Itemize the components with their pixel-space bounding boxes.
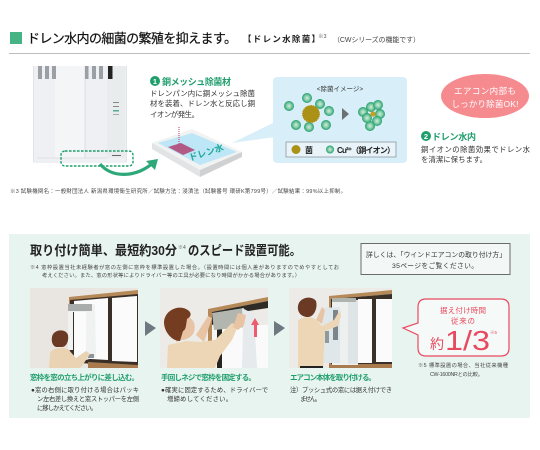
- callout 2: drain water: 2: [424, 132, 428, 141]
- air filter panel: [212, 308, 246, 330]
- callout body: 材を装着、ドレン水と反応し銅: [150, 99, 255, 108]
- installation heading: [30, 243, 301, 258]
- panel: sterilisation image: [232, 77, 407, 163]
- photo step 3: [289, 288, 392, 368]
- panel caption: <除菌イメージ>: [317, 84, 363, 93]
- footnote 4: 考えください。また、窓の形状等によりドライバー等の工具が必要になり時間がかかる場合があります。）: [42, 271, 300, 279]
- copper ions around bacterium: [284, 93, 334, 132]
- number badge: [150, 76, 160, 86]
- callout 1: copper mesh: 1: [153, 77, 157, 86]
- number badge: [421, 131, 431, 141]
- arrow: to drain pan: [100, 163, 153, 174]
- step 3 caption: エアコン本体を取り付ける。: [290, 372, 376, 382]
- series note: （CWシリーズの機能です）: [333, 35, 420, 44]
- dotted leader: [178, 127, 180, 144]
- woman from behind: [49, 348, 90, 368]
- step 2 caption: 増締めしてください。: [167, 394, 232, 403]
- callout heading: 銅メッシュ除菌材: [162, 76, 231, 87]
- icon: green square: [10, 32, 22, 44]
- heading text: ドレン水内の細菌の繁殖を抑えます。: [27, 31, 237, 46]
- callout 2: drain water: [421, 131, 531, 164]
- heading tag: 【ドレン水除菌】: [243, 34, 320, 44]
- badge: pink oval: [441, 74, 529, 118]
- callout body: 銅イオンの除菌効果でドレン水: [421, 145, 531, 154]
- arrow: step 1 to 2: [145, 321, 156, 336]
- speech bubble: one third time: 従来の: [451, 316, 475, 326]
- fitting duct: [332, 298, 358, 365]
- installation heading: 取り付け簡単、最短約30分: [30, 243, 177, 258]
- callout wedge: [232, 122, 275, 143]
- step 1 caption: [30, 372, 139, 412]
- dashed highlight: [61, 151, 133, 166]
- step 3 caption: ません。: [300, 395, 321, 403]
- arrow: before to after: [342, 108, 349, 120]
- callout 1: copper mesh: [150, 76, 255, 119]
- installation heading: ※4: [178, 245, 186, 251]
- legend: 菌: [305, 145, 313, 155]
- speech bubble: one third time: [403, 299, 509, 356]
- fitting duct: [68, 304, 96, 360]
- photo step 2: [160, 288, 268, 368]
- bacterium: [302, 106, 320, 122]
- woman from behind: [298, 310, 341, 368]
- legend: [286, 142, 396, 157]
- step 3 caption: 注）プッシュ式の窓には据え付けでき: [290, 385, 392, 394]
- callout body: を清潔に保ちます。: [421, 155, 487, 164]
- callout body: イオンが発生。: [150, 110, 199, 119]
- callout body: [421, 145, 531, 164]
- reference box: 35ページをご覧ください。: [392, 261, 478, 270]
- installation heading: のスピード設置可能。: [188, 243, 301, 258]
- step 1 caption: に移しかえてください。: [37, 403, 97, 412]
- ions attacking bacterium: [358, 100, 385, 131]
- red arrow up: [251, 318, 259, 337]
- reference box: [361, 244, 510, 274]
- drain pan highlight with arrow: [61, 151, 158, 174]
- callout body: [150, 89, 255, 119]
- callout heading: ドレン水内: [432, 131, 476, 142]
- footnote 3: ※3 試験機関名：一般財団法人 新潟県環境衛生研究所／試験方法：浸漬法（試験番号 環研K第799号）／試験結果：99%以上抑制。: [10, 187, 346, 195]
- footnote mark: ※3: [318, 33, 327, 40]
- step 2 caption: ●確実に固定するため、ドライバーで: [161, 385, 268, 394]
- panel: installation: [9, 234, 530, 418]
- step 3 caption: [290, 372, 392, 403]
- step 1 caption: ●窓の右側に取り付ける場合はパッキ: [31, 385, 139, 394]
- illustration: air conditioner front: [33, 66, 127, 163]
- step 2 caption: 手回しネジで窓枠を固定する。: [161, 372, 256, 382]
- badge: pink oval: エアコン内部も: [454, 86, 516, 96]
- section heading: drain water: [10, 31, 420, 46]
- woman side: [167, 323, 238, 368]
- copper mesh patch: [168, 143, 195, 155]
- water label: ドレン水: [187, 141, 225, 163]
- footnote 5: [418, 361, 509, 378]
- badge: pink oval: しっかり除菌OK!: [452, 99, 518, 109]
- speech bubble: one third time: 1/3: [445, 325, 490, 356]
- callout body: ドレンパン内に銅メッシュ除菌: [150, 89, 255, 98]
- speech bubble: one third time: ※5: [490, 330, 497, 335]
- step 1 caption: 窓枠を窓の立ち上がりに差し込む。: [30, 372, 139, 382]
- air conditioner unit: [323, 307, 340, 363]
- illustration: drain pan: [152, 127, 242, 177]
- footnote 5: CW-1600NRとの比較。: [430, 370, 483, 378]
- footnote 5: ※5 標準設置の場合、当社従来機種: [418, 361, 509, 369]
- speech bubble: one third time: 約: [430, 336, 444, 352]
- photo step 1: [30, 288, 138, 368]
- footnote 4: [30, 263, 340, 279]
- step 1 caption: ン左右差し換えと窓ストッパーを左側: [37, 394, 139, 403]
- footnote 4: ※4 窓枠設置当社未経験者が窓の左側に窓枠を標準設置した場合。（設置時間には個人差がありますのでめやすとしてお: [30, 263, 340, 271]
- legend: Cu²⁺（銅イオン）: [337, 145, 395, 155]
- arrow: step 2 to 3: [274, 321, 285, 336]
- step 2 caption: [161, 372, 268, 403]
- speech bubble: one third time: 据え付け時間: [440, 305, 486, 315]
- reference box: 詳しくは、「ウインドエアコンの取り付け方」: [366, 250, 506, 259]
